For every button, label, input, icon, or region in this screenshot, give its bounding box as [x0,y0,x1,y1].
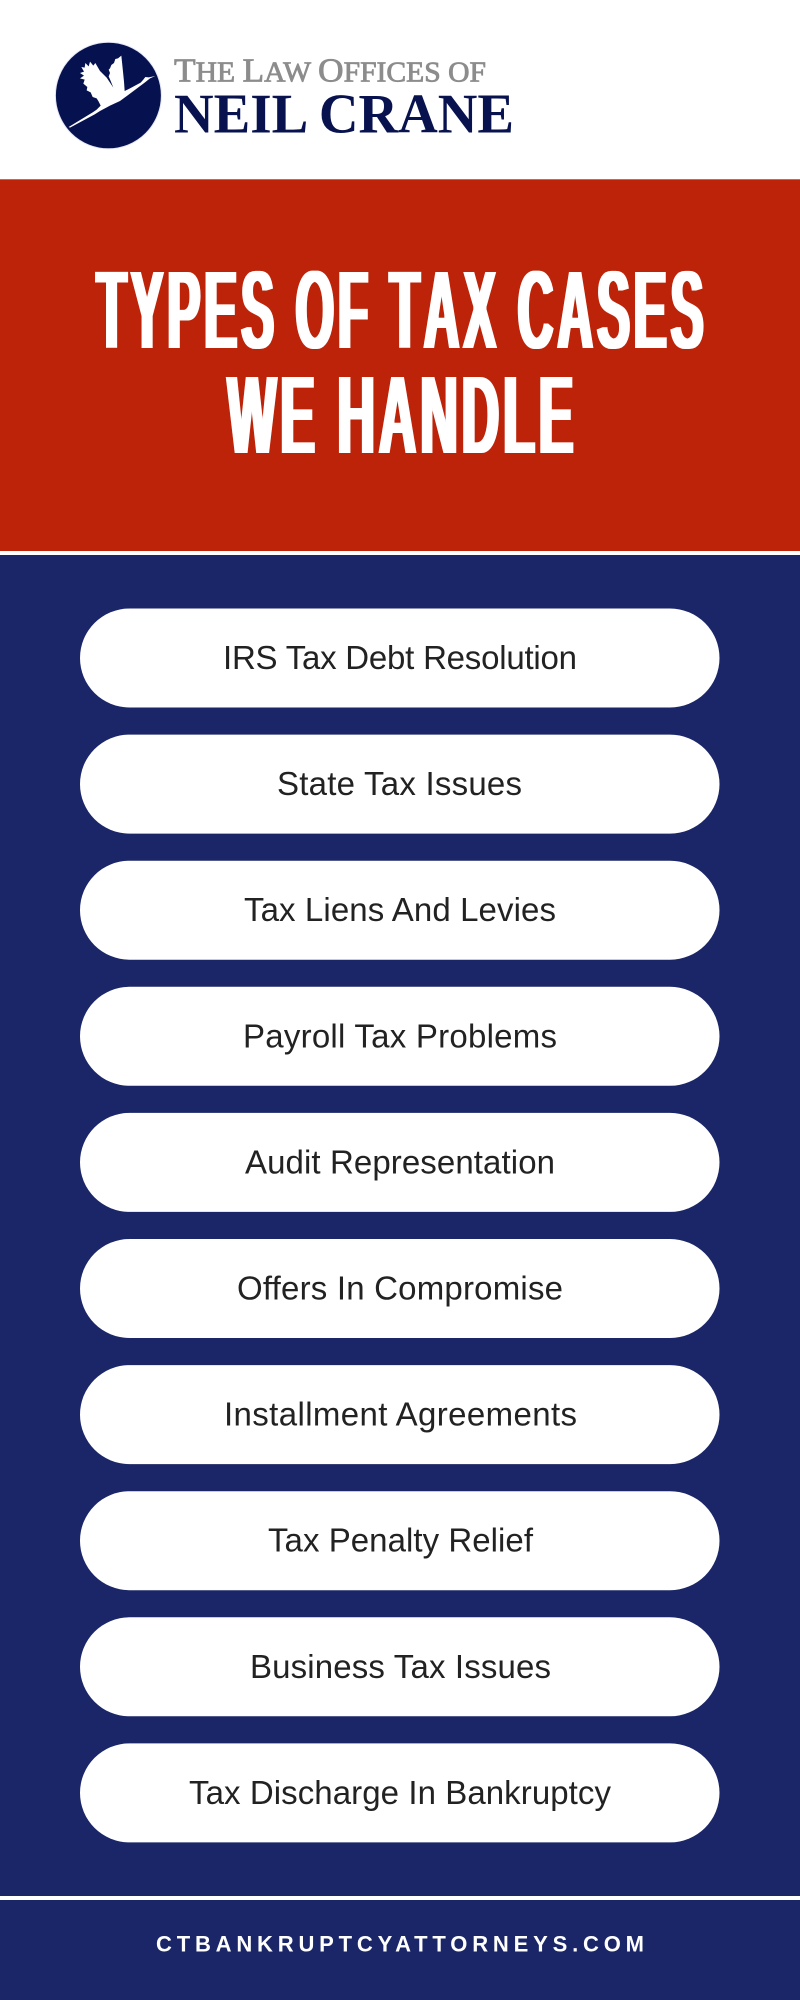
pill: tax liens and levies [80,861,720,960]
pill: tax discharge in bankruptcy [80,1743,720,1842]
pill: tax penalty relief: Tax Penalty Relief [268,1522,534,1559]
panel: footer [0,1900,800,2000]
pill: payroll tax problems [80,987,720,1086]
panel: case types [0,555,800,1896]
pill: audit representation [80,1113,720,1212]
pill: state tax issues: State Tax Issues [277,765,522,802]
footer url: CTBANKRUPTCYATTORNEYS.COM [156,1932,644,1957]
pill: business tax issues [80,1617,720,1716]
pill: tax penalty relief [80,1491,720,1590]
logo [55,42,514,149]
logo text: the law offices of: THE LAW OFFICES OF [174,52,486,90]
pill: business tax issues: Business Tax Issues [250,1648,551,1685]
pill: IRS tax debt resolution: IRS Tax Debt Resolution [223,639,577,676]
pill: installment agreements [80,1365,720,1464]
pill: IRS tax debt resolution [80,608,720,708]
icon: crane emblem [55,42,161,149]
logo text: neil crane: NEIL CRANE [174,84,514,146]
pill: state tax issues [80,735,720,834]
pill: installment agreements: Installment Agreements [224,1396,577,1433]
pill: offers in compromise: Offers In Compromise [237,1270,563,1306]
title [96,247,708,478]
pill: tax discharge in bankruptcy: Tax Discharge In Bankruptcy [189,1774,612,1811]
pill: tax liens and levies: Tax Liens And Levies [244,891,556,928]
pill: audit representation: Audit Representation [245,1143,555,1180]
pill: offers in compromise [80,1239,720,1338]
panel: title banner [0,179,800,551]
pill: payroll tax problems: Payroll Tax Problems [243,1018,557,1054]
